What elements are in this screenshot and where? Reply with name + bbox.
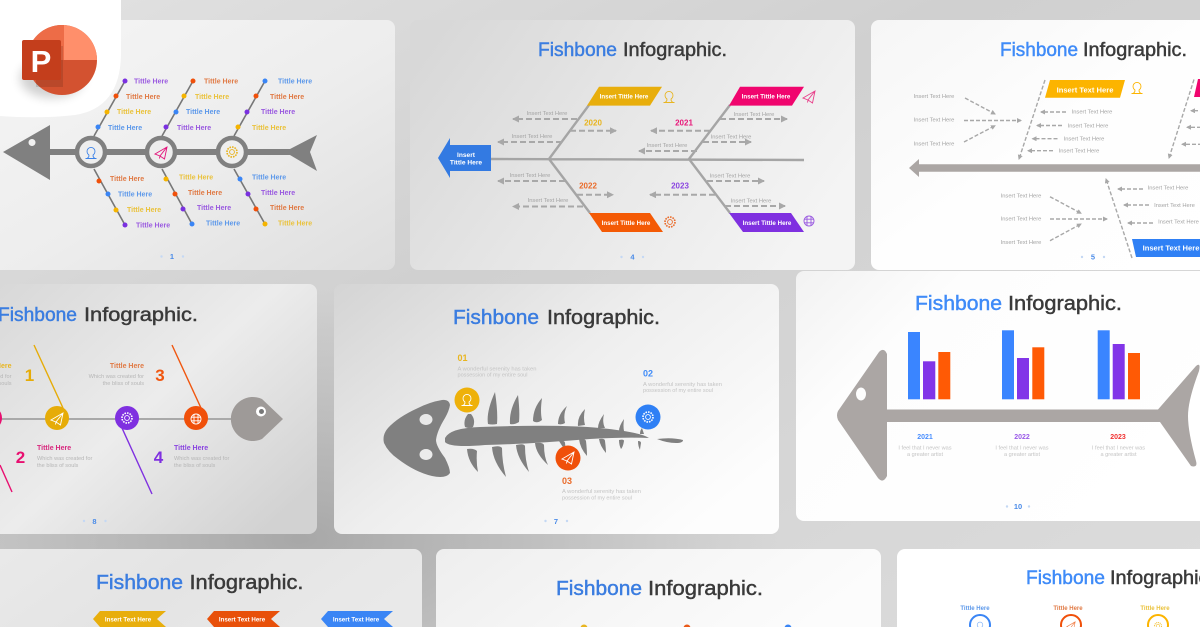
year descriptions: a greater artist <box>1100 452 1137 458</box>
blue header: Insert Text Here <box>1143 244 1199 252</box>
title labels: Tittle Here <box>126 94 160 101</box>
year labels: 2021 <box>675 118 693 128</box>
step descriptions: possession of my entire soul <box>643 388 713 394</box>
panel: bottom centre slide <box>436 549 881 627</box>
panel: slide 8 timeline fish <box>0 284 317 534</box>
slide 4 background <box>410 20 855 270</box>
slide title <box>556 578 763 600</box>
step numbers: 03 <box>562 476 572 486</box>
title labels: Tittle Here <box>110 176 144 183</box>
node circles <box>454 388 660 470</box>
step numbers: 02 <box>643 368 653 378</box>
step descriptions: possession of my entire soul <box>562 495 632 501</box>
year labels: 2023 <box>671 182 689 190</box>
orange header <box>589 213 663 232</box>
year labels: 2022 <box>1014 434 1030 441</box>
slide 1 background <box>0 20 395 270</box>
title labels: Tittle Here <box>270 205 304 212</box>
pink header <box>729 87 804 106</box>
big numbers: 4 <box>154 448 164 467</box>
slide 10 title: Infographic. <box>1008 293 1122 315</box>
dashed arrows <box>498 119 787 206</box>
title labels: Tittle Here <box>188 190 222 197</box>
title labels: Tittle Here <box>127 207 161 214</box>
title labels: Tittle Here <box>118 192 152 198</box>
slide title: Infographic. <box>648 578 763 600</box>
fish body <box>837 350 1200 481</box>
arrow labels: Insert Text Here <box>731 198 771 204</box>
title labels: Tittle Here <box>197 205 231 212</box>
step descriptions: the bliss of souls <box>174 463 216 469</box>
panel: PowerPoint badge <box>0 0 121 117</box>
fish skull <box>384 400 450 477</box>
year descriptions: I feel that I never was <box>1092 445 1145 451</box>
arrow labels <box>510 111 774 204</box>
slide 10 title <box>915 293 1122 315</box>
text labels: Insert Text Here <box>1064 137 1104 143</box>
ring icons <box>970 615 1168 627</box>
panel: slide 7 fish skeleton <box>334 284 779 534</box>
text labels <box>914 94 1199 246</box>
title labels <box>108 78 312 230</box>
page number: 1 <box>170 252 174 261</box>
hub circles with icons <box>77 138 246 166</box>
blue arrow head: Insert <box>457 152 476 159</box>
yellow ribbon: Insert Text Here <box>105 616 152 624</box>
marker dots <box>96 78 268 228</box>
slide 7 title <box>453 307 660 329</box>
step descriptions: A wonderful serenity has taken <box>643 382 722 388</box>
arrow labels: Insert Text Here <box>528 198 568 204</box>
step descriptions: the bliss of souls <box>37 463 79 469</box>
panel: slide 5 dashed fishbone <box>871 20 1200 270</box>
title labels: Tittle Here <box>252 174 286 182</box>
yellow header: Insert Text Here <box>1057 86 1113 94</box>
page number <box>620 252 644 262</box>
step labels <box>0 363 208 452</box>
step descriptions: A wonderful serenity has taken <box>562 489 641 495</box>
bar chart <box>908 330 1140 399</box>
slide 8 title: Fishbone <box>0 305 77 326</box>
slide 7 background <box>334 284 779 534</box>
spine and tail <box>50 135 317 171</box>
fish head arrow <box>3 125 50 180</box>
big numbers <box>16 366 165 467</box>
lower ribs <box>467 439 641 477</box>
orange ribbon <box>207 611 280 627</box>
text labels: Insert Text Here <box>1154 203 1195 209</box>
text labels: Insert Text Here <box>914 118 954 124</box>
step descriptions: Which was created for <box>89 374 144 380</box>
year labels <box>579 118 693 190</box>
small dashed arrows <box>964 80 1200 258</box>
title labels: Tittle Here <box>204 78 238 86</box>
text labels: Insert Text Here <box>1072 110 1112 116</box>
arrow labels: Insert Text Here <box>734 112 774 118</box>
text labels: Insert Text Here <box>914 141 954 147</box>
column labels: Tittle Here <box>1140 606 1170 612</box>
step descriptions: A wonderful serenity has taken <box>458 366 536 372</box>
slide title <box>96 572 304 594</box>
yellow header <box>1045 80 1125 98</box>
slide title <box>1026 568 1200 589</box>
slide background <box>0 549 422 627</box>
pink header <box>1194 79 1200 97</box>
title labels: Tittle Here <box>117 109 151 116</box>
title labels: Tittle Here <box>206 220 240 228</box>
step descriptions <box>0 374 229 469</box>
year labels: 2020 <box>584 118 602 128</box>
yellow ribbon <box>93 611 166 627</box>
slide 4 title: Fishbone <box>538 40 617 61</box>
slide title: Infographic. <box>190 572 304 594</box>
blue arrow head <box>438 138 491 178</box>
header icons <box>664 91 815 227</box>
fish tail <box>657 438 683 443</box>
slide 4 title: Infographic. <box>623 40 727 61</box>
slide 8 title <box>0 305 198 326</box>
panel: slide 4 fishbone with years <box>410 20 855 270</box>
arrow labels: Insert Text Here <box>647 143 687 149</box>
slide background <box>436 549 881 627</box>
page number: 8 <box>92 517 97 526</box>
year labels: 2022 <box>579 182 597 190</box>
title labels: Tittle Here <box>186 109 220 116</box>
page number <box>544 517 568 526</box>
top dots <box>580 624 792 627</box>
slide title: Fishbone <box>556 578 642 600</box>
page number: 10 <box>1014 502 1022 511</box>
slide 7 title: Fishbone <box>453 307 539 329</box>
step numbers <box>458 353 653 486</box>
year labels: 2021 <box>917 434 933 441</box>
pink header: Insert Tittle Here <box>742 93 791 100</box>
text labels: Insert Text Here <box>1148 186 1188 192</box>
year descriptions <box>898 445 1145 458</box>
page number: 7 <box>554 517 558 526</box>
column labels <box>960 606 1170 612</box>
text labels: Insert Text Here <box>1059 149 1099 155</box>
slide 4 title <box>538 40 727 61</box>
slide 5 title <box>1000 40 1187 61</box>
main arrow spine <box>909 159 1200 177</box>
step labels: Tittle Here <box>110 363 144 370</box>
step descriptions <box>458 366 722 501</box>
title labels: Tittle Here <box>134 78 168 86</box>
panel: bottom left slide <box>0 549 422 627</box>
icon: person <box>1132 82 1142 94</box>
title labels: Tittle Here <box>278 78 312 86</box>
slide 5 title: Infographic. <box>1083 40 1187 61</box>
slide 8 background <box>0 284 317 534</box>
panel: slide 1 fishbone with titled dots <box>0 20 395 270</box>
spine <box>0 418 232 420</box>
step descriptions: the bliss of souls <box>103 381 144 387</box>
slide title: Fishbone <box>1026 568 1105 589</box>
yellow header: Insert Tittle Here <box>600 93 649 100</box>
title labels: Tittle Here <box>177 125 211 132</box>
colored bones <box>0 345 201 494</box>
title labels: Tittle Here <box>108 125 142 132</box>
title labels: Tittle Here <box>179 174 213 182</box>
year descriptions: a greater artist <box>907 452 943 458</box>
yellow header <box>587 87 662 106</box>
node circles <box>0 406 208 430</box>
orange ribbon: Insert Text Here <box>219 616 266 624</box>
column labels: Tittle Here <box>1053 606 1083 612</box>
text labels: Insert Text Here <box>914 94 954 100</box>
text labels: Insert Text Here <box>1001 216 1041 222</box>
white corner <box>0 0 121 117</box>
upper ribs <box>464 392 644 434</box>
text labels: Insert Text Here <box>1068 123 1108 129</box>
panel: slide 10 bar chart fish <box>796 271 1200 521</box>
upper and lower bones <box>94 81 265 225</box>
page number <box>1006 502 1030 511</box>
step descriptions: possession of my entire soul <box>458 373 528 379</box>
text labels: Insert Text Here <box>1001 194 1041 200</box>
page number: 4 <box>630 252 635 262</box>
step descriptions: Which was created for <box>174 456 229 462</box>
big numbers: 2 <box>16 448 25 467</box>
blue header <box>1132 239 1200 257</box>
slide 10 background <box>796 271 1200 521</box>
slide title: Fishbone <box>96 572 183 594</box>
year descriptions: I feel that I never was <box>898 445 952 451</box>
arrow labels: Insert Text Here <box>512 134 552 140</box>
purple header: Insert Tittle Here <box>743 220 792 227</box>
text labels: Insert Text Here <box>1001 240 1041 246</box>
slide 7 title: Infographic. <box>547 307 660 329</box>
slide background <box>897 549 1200 627</box>
slide 5 title: Fishbone <box>1000 40 1078 61</box>
blue arrow head: Tittle Here <box>450 160 482 166</box>
slide 8 title: Infographic. <box>84 305 198 326</box>
step labels: Tittle Here <box>174 445 208 452</box>
step labels: Tittle Here <box>37 445 71 452</box>
title labels: Tittle Here <box>278 220 312 228</box>
title labels: Tittle Here <box>261 109 295 116</box>
step descriptions: Which was created for <box>37 456 92 462</box>
title labels: Tittle Here <box>136 222 170 230</box>
page number <box>1081 252 1105 262</box>
fish spine and ribs <box>491 105 804 213</box>
big numbers: 1 <box>25 366 34 385</box>
blue ribbon: Insert Text Here <box>333 616 380 624</box>
orange header: Insert Tittle Here <box>602 220 651 227</box>
year descriptions: I feel that I never was <box>995 445 1049 451</box>
year labels <box>917 434 1126 441</box>
fish head <box>231 397 283 441</box>
slide 10 title: Fishbone <box>915 293 1002 315</box>
year descriptions: a greater artist <box>1004 452 1040 458</box>
title labels: Tittle Here <box>195 94 229 101</box>
step numbers: 01 <box>458 353 468 363</box>
big numbers: 3 <box>155 366 165 385</box>
blue ribbon <box>321 611 393 627</box>
purple header <box>729 213 804 232</box>
text labels: Insert Text Here <box>1158 220 1199 226</box>
slide 5 background <box>871 20 1200 270</box>
arrow labels: Insert Text Here <box>711 134 751 140</box>
arrow labels: Insert Text Here <box>710 174 750 180</box>
panel: bottom right slide <box>897 549 1200 627</box>
page number <box>160 252 184 261</box>
title labels: Tittle Here <box>252 125 286 132</box>
fish body <box>445 426 649 446</box>
title labels: Tittle Here <box>261 190 295 197</box>
page number: 5 <box>1091 252 1095 262</box>
icon: PowerPoint logo: P <box>31 44 51 79</box>
column labels: Tittle Here <box>960 606 990 612</box>
title labels: Tittle Here <box>270 94 304 101</box>
page number <box>83 517 107 526</box>
arrow labels: Insert Text Here <box>510 173 550 179</box>
year labels: 2023 <box>1110 434 1126 441</box>
arrow labels: Insert Text Here <box>527 111 567 117</box>
